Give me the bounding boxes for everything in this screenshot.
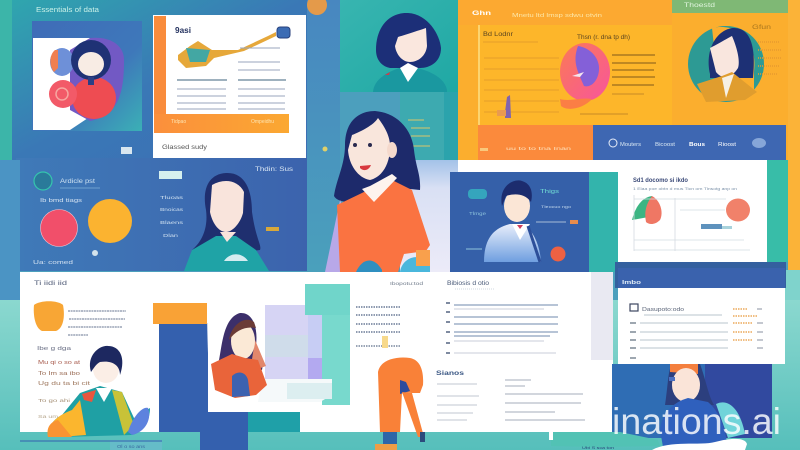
small icon	[92, 250, 98, 256]
text lines	[612, 55, 656, 85]
panel: upper heading band: Mnetu ltd lmsp sdwu otvin	[512, 13, 602, 19]
panel: second row blue section	[16, 158, 307, 271]
list labels: Tluoas	[160, 195, 184, 200]
panel: white chart card: Sd1 docomo si ikdo	[633, 177, 688, 184]
panel: left article: Ti iidi iid	[34, 281, 67, 287]
panel: white upper right	[458, 160, 768, 272]
label: small tag	[121, 147, 132, 154]
panel: white chart card: 1 Elaa poe obtn d mus Ticn om Tlnsotg anp on	[633, 186, 737, 191]
illustration: standing figure with orange top	[375, 358, 425, 450]
heading: 9asi	[175, 26, 191, 35]
chart: red circle	[40, 210, 78, 246]
white tick	[549, 432, 553, 440]
icon: folder	[630, 304, 638, 311]
icon: blue badge	[277, 27, 290, 38]
illustration: person with orange hat	[660, 364, 745, 447]
icon: coin	[49, 80, 77, 108]
panel: strip between sections	[307, 0, 340, 272]
panel: amber chart: Thsn (r. dna tp dh)	[577, 35, 630, 41]
panel: upper heading band: Ghn	[472, 11, 492, 17]
skirt accents	[400, 257, 430, 272]
illustration: amber portrait	[688, 25, 771, 102]
panel: top-left blue section	[12, 0, 327, 160]
illustration: amber portrait: Gfun	[752, 25, 771, 31]
panel: orange lower bar	[478, 125, 593, 160]
panel: amber chart	[478, 25, 672, 125]
woman hair	[218, 313, 263, 370]
heading: Imbo	[622, 280, 641, 286]
panel: blue nav bar: Bous	[689, 142, 705, 148]
panel: document with chart: Ompeidhu	[251, 119, 274, 125]
panel: top teal portrait	[340, 0, 458, 92]
panel: left article	[34, 281, 126, 419]
panel: teal strip below portrait	[400, 92, 458, 160]
chart: yellow circle	[88, 199, 132, 243]
label: cyan pill	[468, 189, 487, 199]
woman face	[231, 323, 255, 359]
hair back	[334, 111, 420, 202]
data rows	[640, 315, 728, 348]
icon: orange shield	[34, 301, 64, 331]
icon: teal ring	[34, 172, 52, 190]
panel: left article: Mu qi o so at	[38, 360, 81, 366]
illustration: central woman	[325, 111, 430, 272]
chart: red dot	[550, 246, 566, 262]
heading: top-left caption: Essentials of data	[36, 7, 99, 14]
lavender swatches	[265, 305, 308, 385]
chart: area map	[178, 32, 276, 68]
icon: oval	[752, 138, 766, 148]
panel: lower teal backdrop	[0, 300, 800, 450]
panel: blue column	[153, 303, 300, 450]
panel: second row blue section: Blaens	[160, 220, 184, 225]
text lines	[68, 311, 126, 335]
panel: second row blue section: Thdin: Sus	[255, 167, 293, 173]
sub-heading: Sianos	[436, 370, 465, 377]
chart: blob	[560, 43, 610, 101]
panel: document with chart	[153, 15, 306, 158]
panel: right article text: Bibiosis d otio	[447, 281, 490, 287]
orange header	[153, 303, 207, 324]
panel: green top tab	[672, 0, 788, 13]
chart: coral circle	[726, 198, 750, 222]
panel: blue nav bar: Mouters	[620, 142, 642, 148]
icon: orange badge	[307, 0, 327, 15]
face	[348, 118, 390, 180]
white swoosh	[652, 439, 747, 450]
bottom teal shapes	[551, 432, 660, 447]
panel: upper heading band	[458, 0, 672, 25]
illustration: shoulders	[373, 66, 447, 92]
panel: right article text	[436, 281, 585, 420]
illustration: red body	[72, 77, 116, 119]
illustration: hair	[376, 13, 441, 68]
sleeve lavender	[325, 200, 352, 272]
illustration: face	[395, 28, 427, 62]
bottom caption: Ol o so ans	[117, 444, 146, 449]
icon: small bubble	[50, 48, 74, 76]
panel: orange lower bar: uu to to tna Inan	[506, 146, 572, 151]
chart title: Bd Lodnr	[483, 32, 513, 38]
axes	[634, 199, 750, 250]
panel: lower right dashboard	[612, 262, 786, 438]
lower text lines	[437, 384, 479, 420]
laptop	[258, 379, 332, 402]
panel: second row blue section: Ib bmd tiags	[40, 198, 83, 204]
heading: Ardicle pst	[60, 179, 95, 185]
panel: left article: Ug du ta bi cit	[38, 381, 91, 387]
panel: blue man card	[450, 172, 618, 272]
panel: lower right dashboard: Dasupoto:odo	[642, 307, 684, 313]
panel: amber section	[458, 0, 800, 160]
panel: white chart card	[632, 177, 750, 251]
panel: second row blue section: Dlan	[163, 233, 179, 238]
illustration: man	[484, 224, 541, 262]
panel: blue man card: Thigs	[540, 189, 559, 195]
watermark: inations.ai	[612, 401, 781, 442]
panel: center text column: Ibopotu:tod	[390, 281, 424, 286]
panel: left article: To Im sa ibo	[38, 371, 80, 377]
panel: blue man card: Tleocuo ngo	[541, 204, 572, 209]
caption: Ua: comed	[33, 260, 73, 266]
grid lines	[483, 42, 559, 112]
bottom caption: Ubi S sca ton	[582, 445, 614, 450]
panel: portrait card	[32, 21, 142, 131]
panel: teal side strip	[767, 160, 788, 262]
icon: yellow dot	[322, 146, 328, 152]
panel: second row blue section: Bnoicas	[160, 207, 184, 212]
panel: right teal edge	[785, 270, 800, 300]
collar	[362, 174, 397, 202]
panel: left article: Sa um	[38, 414, 58, 419]
chart: bar	[505, 95, 511, 118]
teal block	[305, 284, 350, 315]
panel: blue nav bar: Bicoost	[655, 142, 676, 148]
panel: portrait card with woman	[207, 284, 350, 412]
panel: center text column	[356, 281, 424, 348]
chart: bars	[701, 224, 722, 229]
sweater	[337, 180, 430, 272]
panel: green top tab: Thoestd	[684, 3, 715, 9]
woman top	[211, 354, 267, 398]
illustration: head	[71, 40, 111, 80]
amber values	[733, 309, 757, 340]
illustration: rainbow child	[47, 346, 150, 437]
panel: lower-left blue band	[0, 160, 20, 300]
panel: blue nav bar	[593, 125, 786, 160]
chart: pie	[632, 196, 654, 220]
panel: blue nav bar: Rioost	[718, 142, 737, 148]
panel: blue man card: Tlmge	[469, 211, 487, 216]
label	[159, 171, 182, 179]
panel: left article: To go ahi	[38, 398, 70, 403]
right amber strip	[788, 0, 800, 271]
panel: light lavender backdrop	[400, 160, 458, 272]
panel: main white document row	[20, 272, 613, 432]
band labels: Tidpao	[171, 119, 186, 125]
text lines	[177, 48, 286, 109]
decorative text block	[758, 42, 782, 74]
icon: cloud	[609, 139, 617, 147]
left teal strip	[0, 0, 12, 160]
bottom caption	[20, 440, 614, 450]
illustration: woman in teal	[184, 173, 269, 271]
caption: Glassed sudy	[162, 145, 207, 151]
panel: left article: Ibe g dga	[37, 346, 72, 352]
